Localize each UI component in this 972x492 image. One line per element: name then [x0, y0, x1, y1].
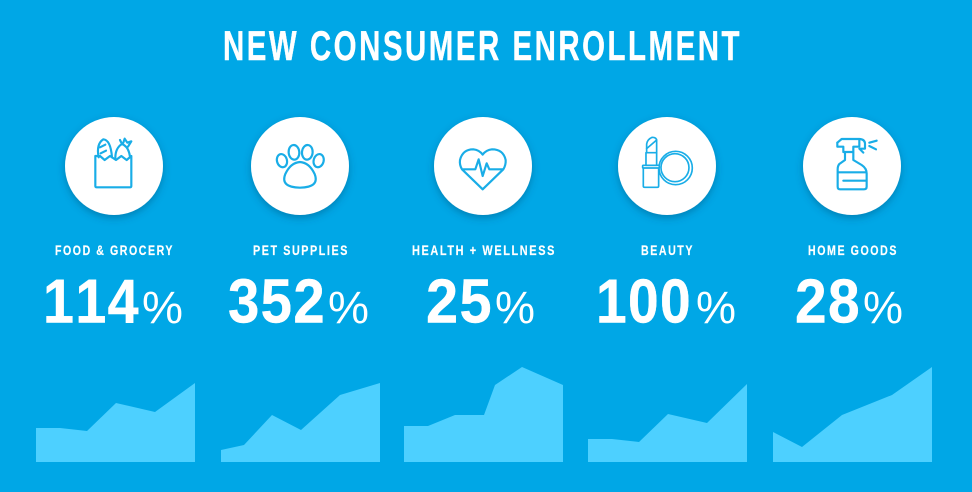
panel: health and wellness — [404, 117, 563, 462]
icon: heart with pulse — [434, 117, 532, 215]
panel: beauty — [588, 117, 747, 462]
panel: home goods — [773, 117, 932, 462]
value: 352: 352 — [228, 268, 326, 336]
label: food and grocery: FOOD & GROCERY — [55, 243, 174, 258]
value: 28: 28 — [795, 268, 861, 336]
area chart: food and grocery — [36, 383, 195, 462]
icon: lipstick and compact — [618, 117, 716, 215]
label: pet supplies: PET SUPPLIES — [253, 243, 349, 258]
panel: food and grocery — [36, 117, 195, 462]
area chart: health and wellness — [404, 367, 563, 462]
percent sign: % — [495, 282, 535, 333]
icon: grocery bag — [65, 117, 163, 215]
area chart: home goods — [773, 367, 932, 462]
panel: pet supplies — [221, 117, 380, 462]
icon: paw — [251, 117, 349, 215]
icon: spray bottle — [803, 117, 901, 215]
area chart: beauty — [588, 384, 747, 462]
value: 100: 100 — [596, 268, 692, 336]
percent sign: % — [696, 282, 736, 333]
percent sign: % — [863, 282, 903, 333]
label: home goods: HOME GOODS — [808, 243, 898, 258]
value: 114: 114 — [43, 268, 140, 336]
percent sign: % — [142, 282, 183, 333]
percent sign: % — [328, 282, 369, 333]
label: health and wellness: HEALTH + WELLNESS — [412, 243, 556, 258]
label: beauty: BEAUTY — [641, 243, 694, 258]
value: 25: 25 — [426, 268, 493, 336]
area chart: pet supplies — [221, 383, 380, 462]
title: NEW CONSUMER ENROLLMENT — [223, 22, 742, 69]
